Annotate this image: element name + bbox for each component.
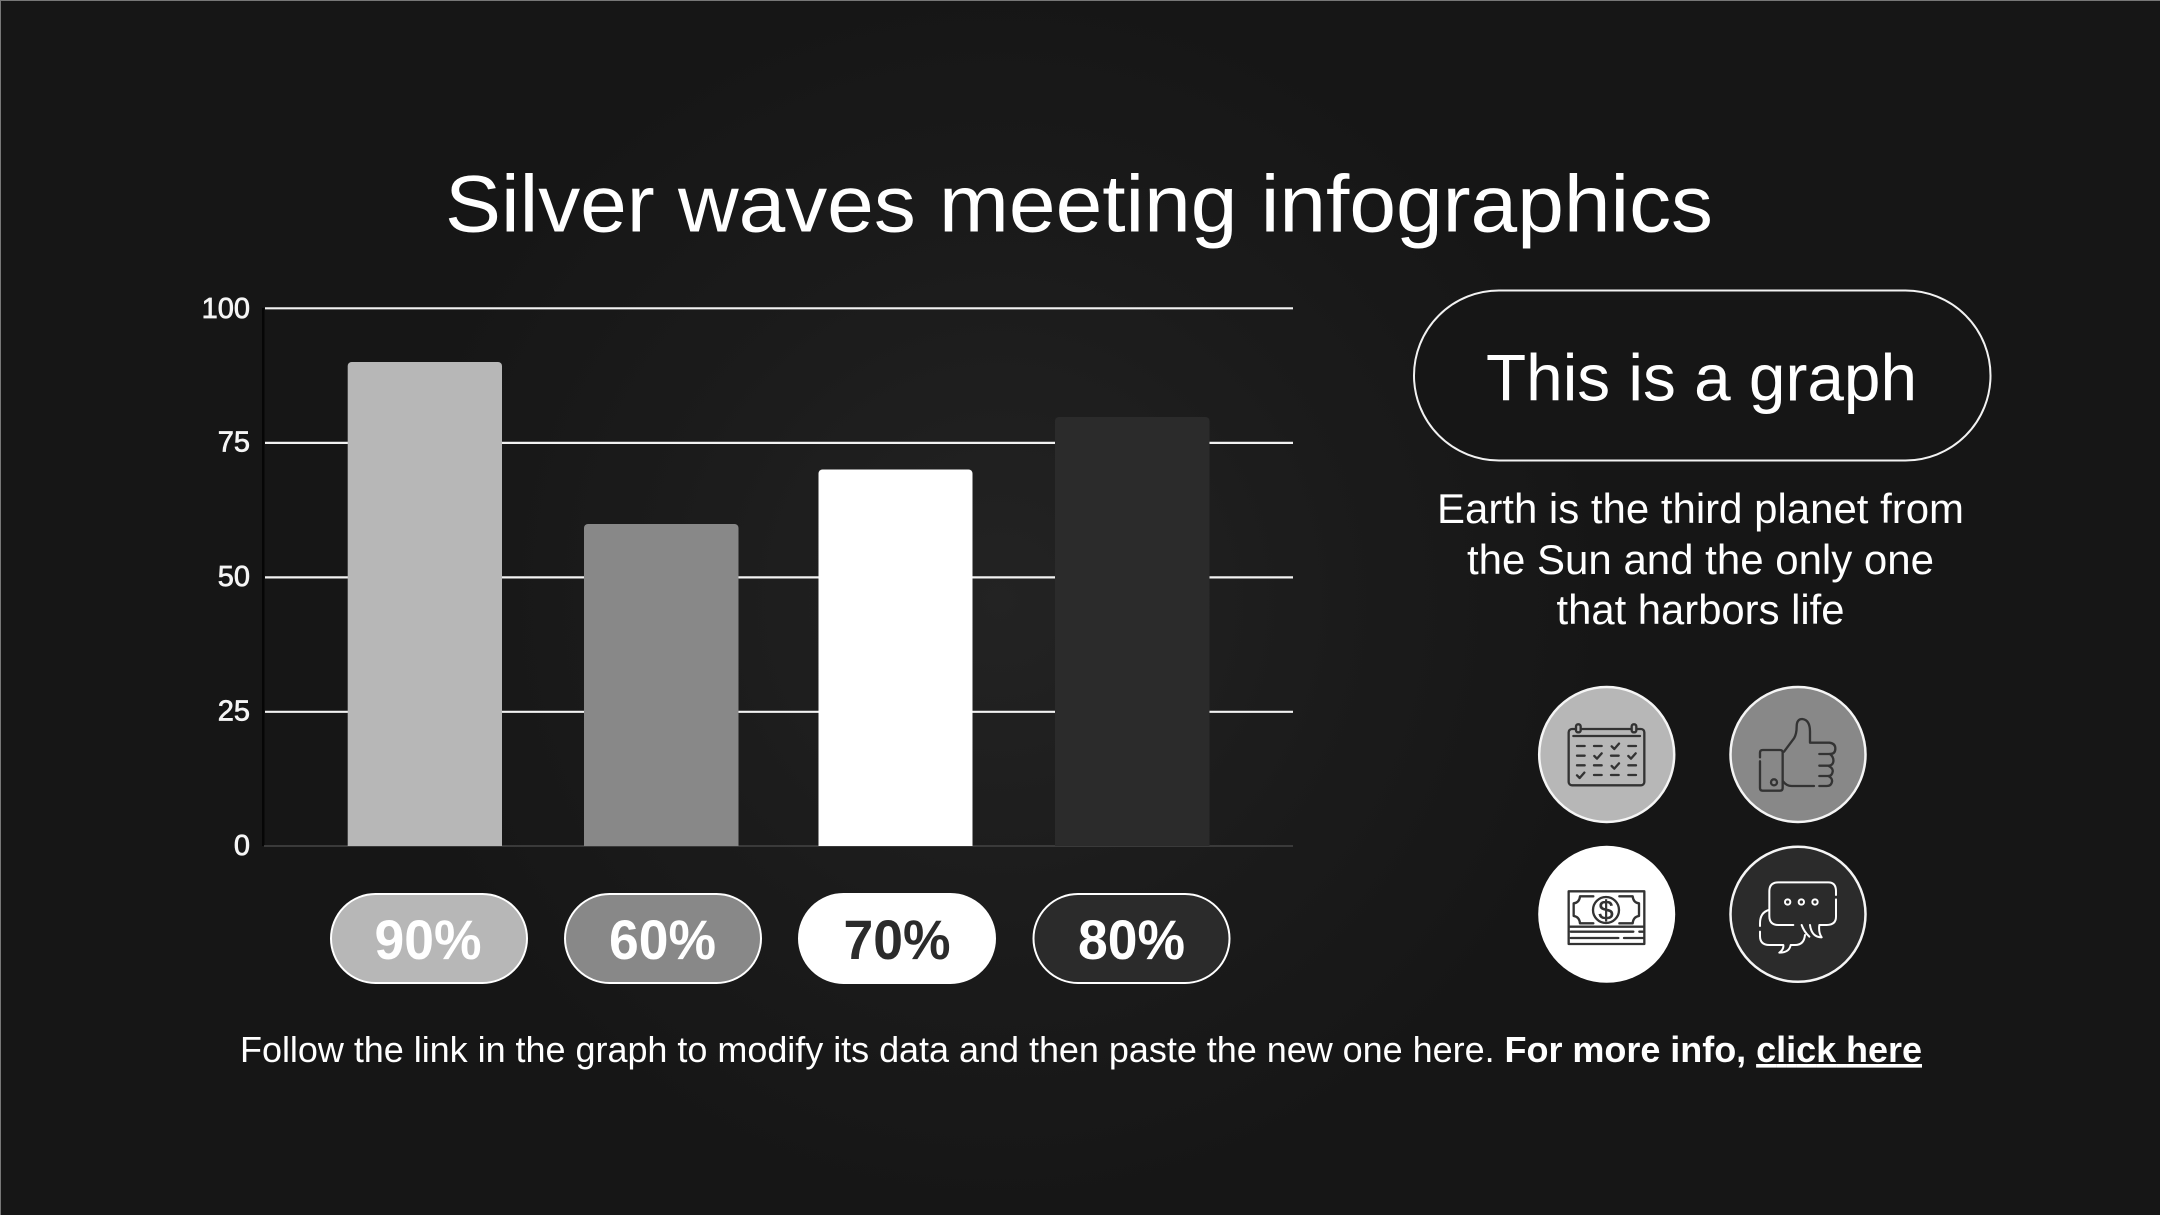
bar 90 xyxy=(348,362,502,846)
icon: money xyxy=(1538,846,1675,983)
pill 80% xyxy=(1034,894,1230,983)
icon: chat bubbles xyxy=(1730,847,1866,982)
y axis labels: 50 xyxy=(218,561,250,593)
icon: thumbs up xyxy=(1730,687,1866,822)
callout: this is a graph: This is a graph xyxy=(1486,340,1917,414)
pill 90%: 90% xyxy=(374,908,482,971)
y axis line xyxy=(262,308,264,846)
callout: this is a graph xyxy=(1414,290,1990,460)
icon: calendar xyxy=(1539,687,1674,822)
pill 70%: 70% xyxy=(844,908,950,971)
pill 80%: 80% xyxy=(1078,908,1185,971)
description text xyxy=(1437,485,1964,633)
icon grid xyxy=(1538,687,1866,983)
percentage pills xyxy=(331,894,1230,983)
icon: money: $ xyxy=(1598,896,1614,926)
bar 80 xyxy=(1055,417,1210,846)
gridlines xyxy=(265,308,1293,712)
description text: Earth is the third planet from xyxy=(1437,485,1964,532)
description text: the Sun and the only one xyxy=(1467,536,1934,583)
y axis labels xyxy=(202,293,250,862)
x axis line xyxy=(264,845,1293,847)
footer note: Follow the link in the graph to modify its data and then paste the new one here. For more info, click here xyxy=(240,1029,1922,1070)
bar 70 xyxy=(818,470,972,846)
pill 60%: 60% xyxy=(609,908,716,971)
title: Silver waves meeting infographics xyxy=(445,160,1713,250)
pill 60% xyxy=(565,894,761,983)
bar 60 xyxy=(584,524,738,846)
y axis labels: 75 xyxy=(218,426,250,458)
y axis labels: 100 xyxy=(202,293,250,325)
description text: that harbors life xyxy=(1556,586,1844,633)
y axis labels: 25 xyxy=(218,696,250,728)
pill 70% xyxy=(799,894,995,983)
bar chart xyxy=(202,293,1293,862)
y axis labels: 0 xyxy=(234,830,250,862)
pill 90% xyxy=(331,894,527,983)
